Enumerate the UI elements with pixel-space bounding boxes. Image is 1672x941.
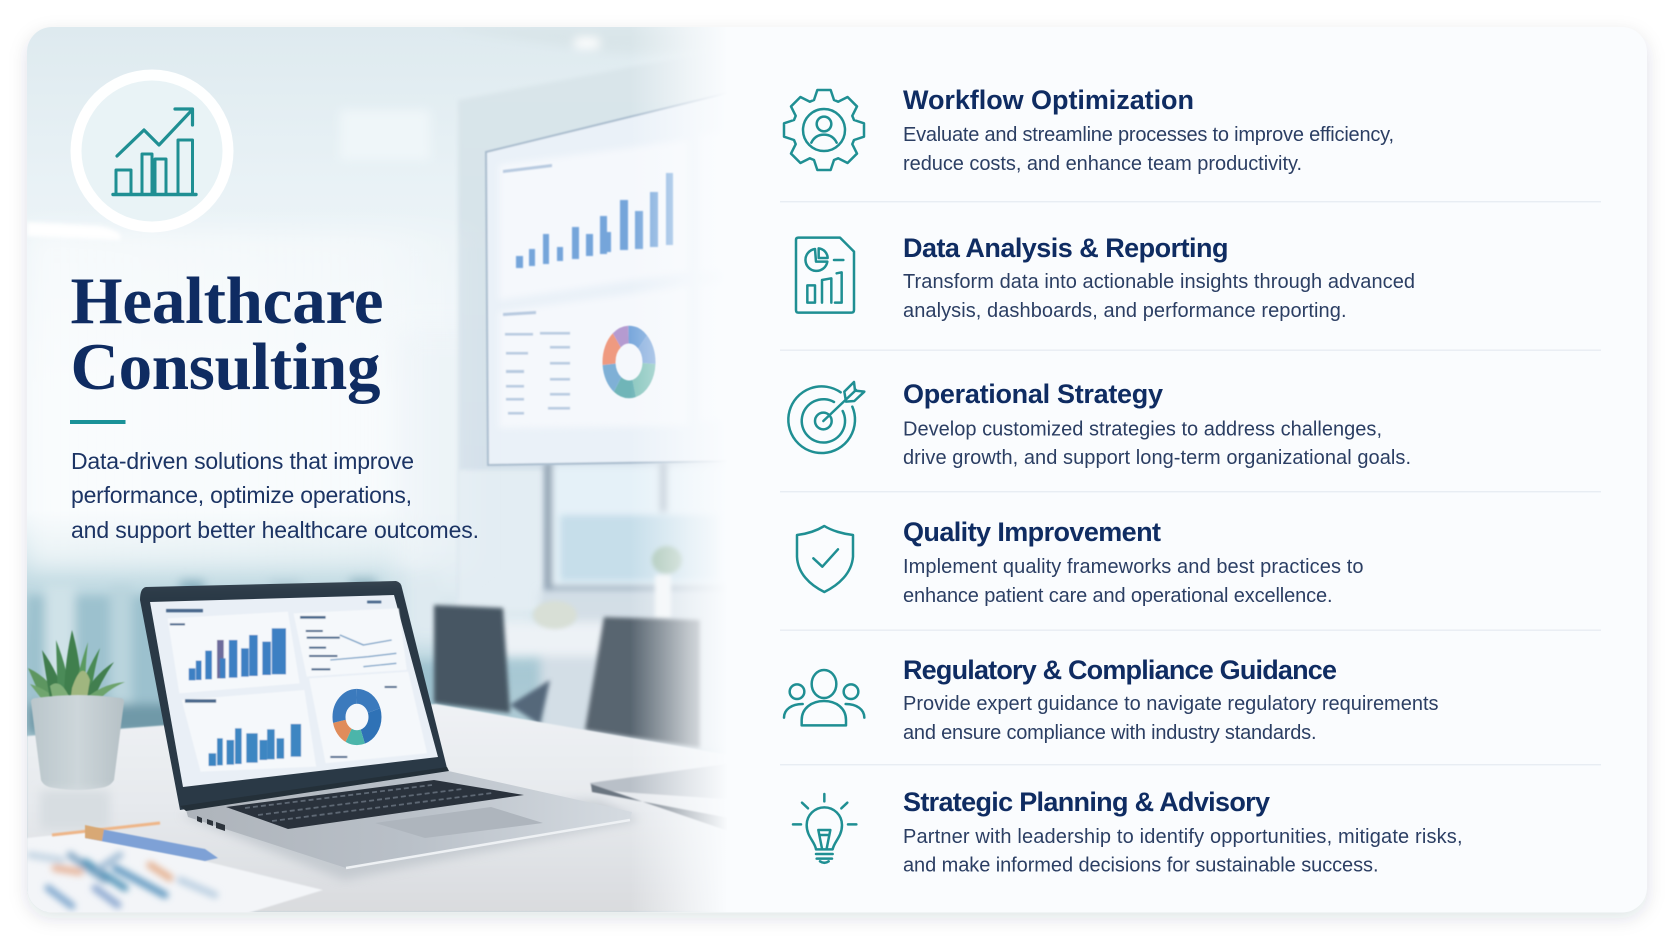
service: Regulatory & Compliance Guidance [784, 655, 1438, 744]
heading: Quality Improvement [903, 517, 1161, 547]
description [903, 826, 1462, 876]
ports [197, 816, 225, 831]
description: and ensure compliance with industry standards. [903, 722, 1316, 744]
intro paragraph [71, 448, 479, 543]
window plant [533, 546, 682, 629]
description: Transform data into actionable insights through advanced [903, 271, 1415, 293]
description [903, 271, 1415, 322]
screen line chart [330, 635, 396, 667]
divider [780, 764, 1601, 765]
icon: gear with person [784, 90, 864, 170]
heading: Strategic Planning & Advisory [903, 787, 1270, 817]
baseline [113, 193, 196, 196]
divider [780, 491, 1601, 492]
heading: Workflow Optimization [903, 85, 1194, 115]
table reflection [40, 790, 110, 830]
background room [504, 587, 710, 746]
plant [28, 630, 125, 790]
screen captions and lines [166, 601, 397, 758]
trackpad [375, 807, 543, 838]
description: reduce costs, and enhance team productivity. [903, 153, 1302, 175]
monitor chart captions [503, 164, 570, 414]
service: Strategic Planning & Advisory [793, 787, 1462, 876]
description: drive growth, and support long-term organizational goals. [903, 447, 1411, 469]
curtain column [388, 541, 536, 662]
panel: office photo [27, 27, 752, 914]
ceiling fixtures [344, 36, 599, 153]
icon badge: growth chart [70, 70, 234, 232]
keyboard key highlights [245, 785, 492, 821]
divider [780, 350, 1601, 351]
title accent rule [70, 420, 126, 424]
laptop shadow [180, 800, 640, 880]
keyboard [226, 780, 524, 829]
monitor frame [484, 98, 703, 466]
pen [85, 825, 218, 861]
main title: Consulting [70, 330, 380, 404]
description [903, 418, 1411, 469]
right edge fade [630, 27, 745, 913]
background window [540, 464, 687, 594]
trend arrow [117, 109, 192, 156]
icon: shield with check [797, 526, 853, 592]
badge inner disk [82, 80, 222, 222]
service: Workflow Optimization [784, 85, 1394, 175]
chairs [434, 605, 700, 748]
blurred window buildings [27, 570, 458, 736]
plant pot [31, 695, 124, 790]
monitor panels [502, 149, 654, 426]
heading: Regulatory & Compliance Guidance [903, 655, 1337, 685]
divider [780, 201, 1601, 202]
laptop lid [140, 581, 447, 810]
description [903, 124, 1394, 175]
description [903, 693, 1438, 744]
clean panel right of the photo [727, 27, 752, 913]
icon: three people [784, 670, 864, 725]
monitor bar chart [516, 173, 673, 268]
screen panels [168, 608, 427, 772]
monitor donut chart [609, 335, 649, 389]
paper marks [30, 855, 215, 906]
main title: Healthcare [70, 264, 384, 338]
back wall [457, 72, 684, 520]
icon: light bulb [793, 794, 856, 863]
ceiling light streak [27, 222, 121, 240]
intro paragraph: Data-driven solutions that improve [71, 448, 414, 474]
description: Implement quality frameworks and best practices to [903, 556, 1364, 578]
paper sheet [27, 832, 323, 914]
service: Quality Improvement [797, 517, 1364, 607]
description [903, 556, 1364, 607]
laptop hinge [180, 767, 449, 811]
screen donut chart [339, 696, 375, 738]
main title [70, 264, 384, 404]
table top [27, 704, 740, 912]
badge ring [70, 70, 234, 232]
bars [116, 140, 192, 194]
icon: report document [796, 238, 854, 313]
description: analysis, dashboards, and performance reporting. [903, 300, 1346, 322]
description: and make informed decisions for sustainable success. [903, 854, 1378, 876]
laptop base [186, 770, 632, 868]
intro paragraph: and support better healthcare outcomes. [71, 517, 479, 543]
laptop screen [150, 595, 438, 787]
orange marker [52, 823, 160, 835]
wall lower curtain [458, 470, 544, 610]
service: Data Analysis & Reporting [796, 233, 1415, 322]
screen bar chart bottom [209, 724, 301, 766]
photo backdrop [27, 27, 737, 912]
laptop [140, 581, 640, 880]
description: enhance patient care and operational excellence. [903, 585, 1332, 607]
icon: target and arrow [788, 382, 864, 453]
description: Evaluate and streamline processes to improve efficiency, [903, 124, 1394, 146]
laptop screen dashboard [166, 601, 427, 772]
plant leaves [28, 630, 125, 704]
left text veil [27, 230, 487, 570]
screen bar chart top [189, 628, 286, 680]
description: Develop customized strategies to address challenges, [903, 418, 1382, 440]
description: Partner with leadership to identify opportunities, mitigate risks, [903, 826, 1462, 848]
heading: Data Analysis & Reporting [903, 233, 1228, 263]
description: Provide expert guidance to navigate regulatory requirements [903, 693, 1438, 715]
closed notebook [590, 762, 740, 835]
divider [780, 630, 1601, 631]
front edge highlight [346, 820, 630, 868]
service: Operational Strategy [788, 379, 1411, 469]
heading: Operational Strategy [903, 379, 1163, 409]
paper with charts [27, 832, 323, 914]
wall monitor [484, 98, 703, 466]
intro paragraph: performance, optimize operations, [71, 482, 412, 508]
